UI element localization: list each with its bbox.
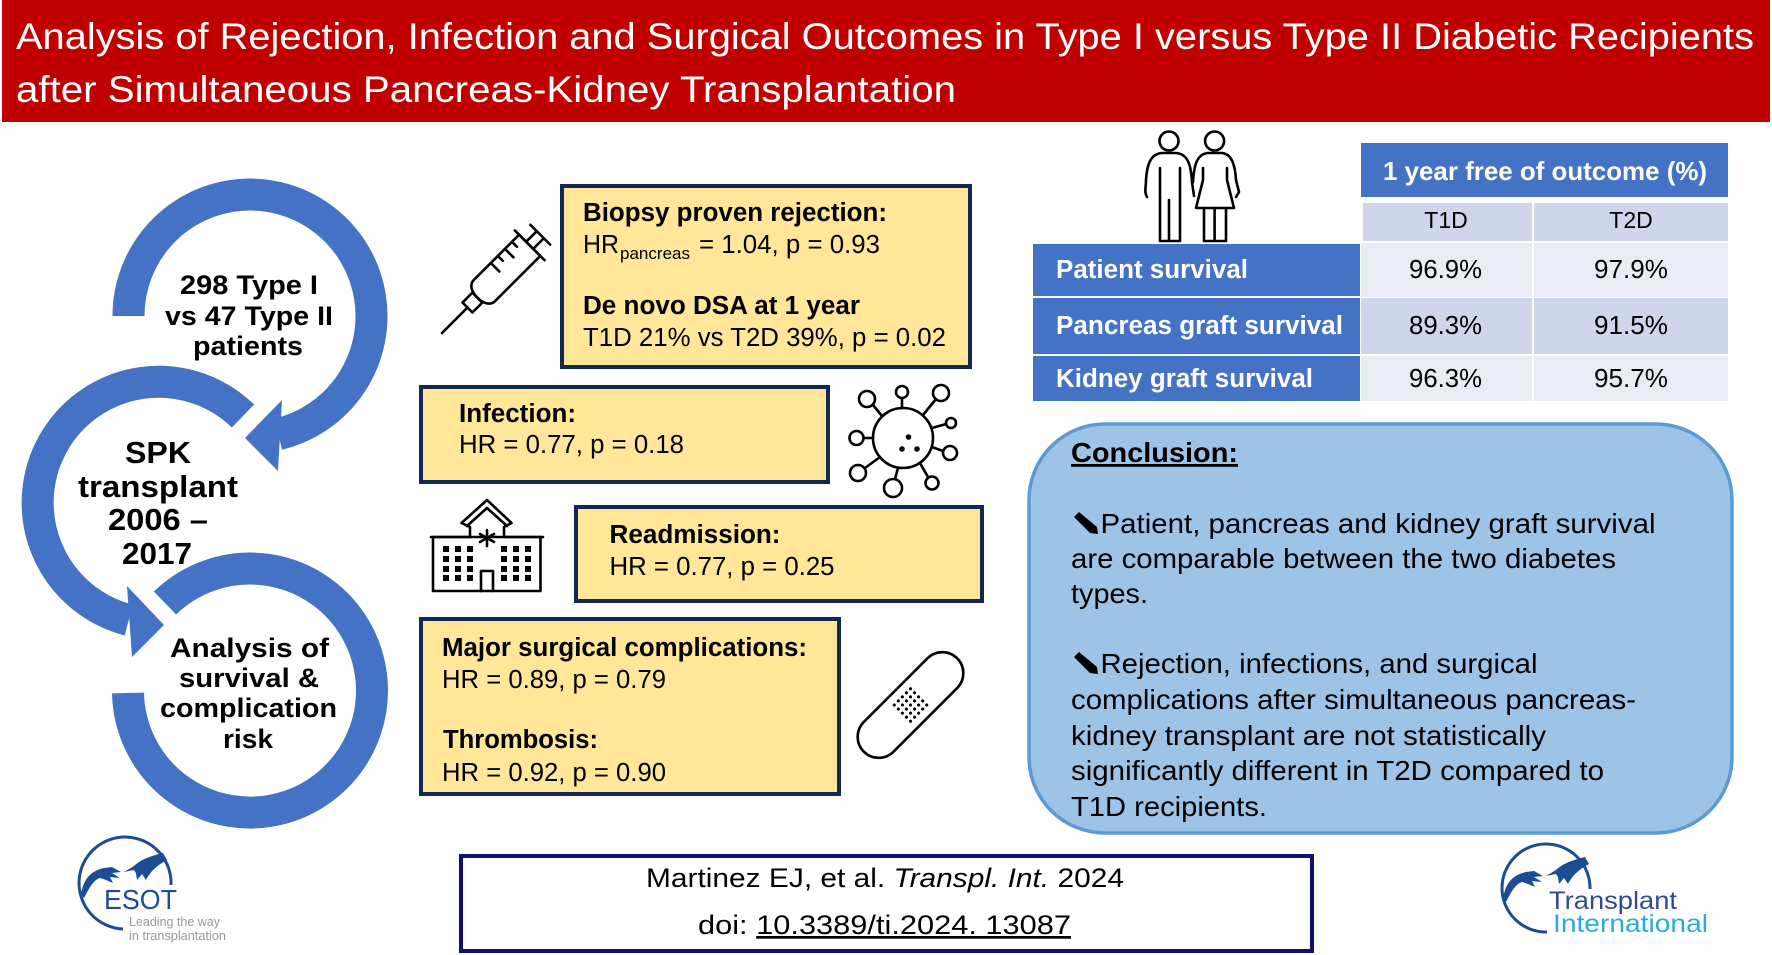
- bullet icon: pencil 1: [1074, 512, 1098, 534]
- conclusion point 2: complications after simultaneous pancreas-: [1071, 684, 1636, 715]
- panel: surgical complications and thrombosis: [421, 619, 839, 794]
- row: pancreas graft survival: [1033, 298, 1728, 354]
- panel: rejection and DSA: pancreas: [620, 244, 690, 263]
- logo: Transplant International: International: [1553, 910, 1708, 938]
- title banner: [2, 0, 1770, 122]
- arrow 1: top circle: [128, 195, 371, 471]
- conclusion point 1: are comparable between the two diabetes: [1071, 543, 1616, 574]
- logo: Transplant International: [1502, 844, 1708, 938]
- panel: rejection and DSA: De novo DSA at 1 year: [583, 292, 860, 320]
- conclusion point 2: kidney transplant are not statistically: [1071, 720, 1546, 751]
- step text: SPK transplant: 2017: [122, 536, 192, 571]
- step text: analysis: Analysis of: [170, 633, 330, 663]
- panel: readmission: HR = 0.77, p = 0.25: [610, 553, 834, 581]
- row: pancreas graft survival: Pancreas graft survival: [1056, 312, 1343, 340]
- table header: 1 year free of outcome (%): [1383, 156, 1707, 186]
- panel: conclusion: [1029, 424, 1732, 833]
- conclusion point 1: types.: [1071, 578, 1148, 609]
- panel: rejection and DSA: = 1.04, p = 0.93: [699, 231, 880, 259]
- step text: SPK transplant: transplant: [78, 469, 238, 504]
- panel: infection: [421, 387, 828, 482]
- conclusion point 2: significantly different in T2D compared to: [1071, 755, 1604, 786]
- icon: hospital: [431, 500, 543, 591]
- step text: SPK transplant: 2006 –: [108, 502, 208, 537]
- panel: infection: Infection:: [459, 400, 576, 428]
- logo: Transplant International: Transplant: [1549, 887, 1677, 915]
- conclusion point 2: Rejection, infections, and surgical: [1100, 648, 1538, 679]
- arrow 2: middle circle: [38, 382, 243, 657]
- step text: SPK transplant: SPK: [125, 435, 192, 470]
- panel: surgical complications and thrombosis: Major surgical complications:: [442, 634, 807, 662]
- row: kidney graft survival: Kidney graft survival: [1056, 365, 1313, 393]
- icon: virus: [850, 385, 957, 497]
- row: pancreas graft survival: 91.5%: [1594, 312, 1668, 340]
- panel: readmission: Readmission:: [610, 521, 780, 549]
- row: kidney graft survival: 96.3%: [1409, 365, 1482, 393]
- table: 1 year free of outcome: [1033, 143, 1728, 401]
- icon: syringe: [427, 220, 555, 348]
- step text: patients: [165, 270, 333, 361]
- table header: [1361, 143, 1728, 197]
- panel: rejection and DSA: HR: [583, 231, 619, 259]
- title banner: Analysis of Rejection, Infection and Surgical Outcomes in Type I versus Type II Diabetic Recipients: [16, 16, 1754, 57]
- bullet icon: pencil 2: [1074, 652, 1098, 674]
- row: kidney graft survival: [1033, 356, 1728, 401]
- conclusion point 2: T1D recipients.: [1071, 791, 1267, 822]
- step text: SPK transplant: [78, 435, 238, 571]
- citation box: [461, 856, 1312, 951]
- circular arrow process: study flow: [38, 195, 372, 813]
- panel: rejection and DSA: T1D 21% vs T2D 39%, p = 0.02: [583, 324, 946, 352]
- row: patient survival: [1033, 243, 1728, 297]
- step text: analysis: [160, 633, 337, 754]
- citation box: Martinez EJ, et al. Transpl. Int. 2024: [646, 863, 1124, 893]
- column headers: [1363, 203, 1728, 241]
- panel: infection: HR = 0.77, p = 0.18: [459, 431, 684, 459]
- icon: man and woman: [1145, 132, 1239, 241]
- panel: surgical complications and thrombosis: HR = 0.92, p = 0.90: [442, 759, 666, 787]
- row: kidney graft survival: 95.7%: [1594, 365, 1668, 393]
- logo: ESOT: [79, 837, 226, 943]
- step text: patients: patients: [193, 331, 303, 361]
- icon: bandage: [849, 643, 972, 767]
- column headers: T1D: [1424, 207, 1468, 233]
- panel: surgical complications and thrombosis: HR = 0.89, p = 0.79: [442, 666, 666, 694]
- panel: surgical complications and thrombosis: Thrombosis:: [443, 726, 598, 754]
- step text: analysis: survival &: [179, 663, 319, 693]
- row: patient survival: 97.9%: [1594, 256, 1668, 284]
- conclusion point 1: [1071, 508, 1656, 609]
- logo: ESOT: Leading the way: [129, 914, 220, 929]
- title banner: after Simultaneous Pancreas-Kidney Transplantation: [16, 69, 956, 110]
- row: pancreas graft survival: 89.3%: [1409, 312, 1482, 340]
- arrow 3: bottom circle: [128, 569, 372, 813]
- panel: readmission: [576, 507, 982, 601]
- step text: analysis: risk: [223, 724, 274, 754]
- panel: rejection and DSA: Biopsy proven rejection:: [583, 199, 887, 227]
- conclusion point 2: [1071, 648, 1636, 822]
- conclusion heading: Conclusion:: [1071, 437, 1238, 468]
- panel: rejection and DSA: [562, 186, 970, 367]
- step text: patients: 298 Type I: [180, 270, 318, 300]
- column headers: T2D: [1609, 207, 1653, 233]
- row: patient survival: 96.9%: [1409, 256, 1482, 284]
- step text: patients: vs 47 Type II: [165, 301, 333, 331]
- logo: ESOT: in transplantation: [129, 928, 226, 943]
- conclusion point 1: Patient, pancreas and kidney graft survival: [1100, 508, 1656, 539]
- citation box: doi: 10.3389/ti.2024. 13087: [698, 910, 1071, 940]
- logo: ESOT: ESOT: [104, 884, 177, 915]
- row: patient survival: Patient survival: [1056, 256, 1248, 284]
- step text: analysis: complication: [160, 693, 337, 723]
